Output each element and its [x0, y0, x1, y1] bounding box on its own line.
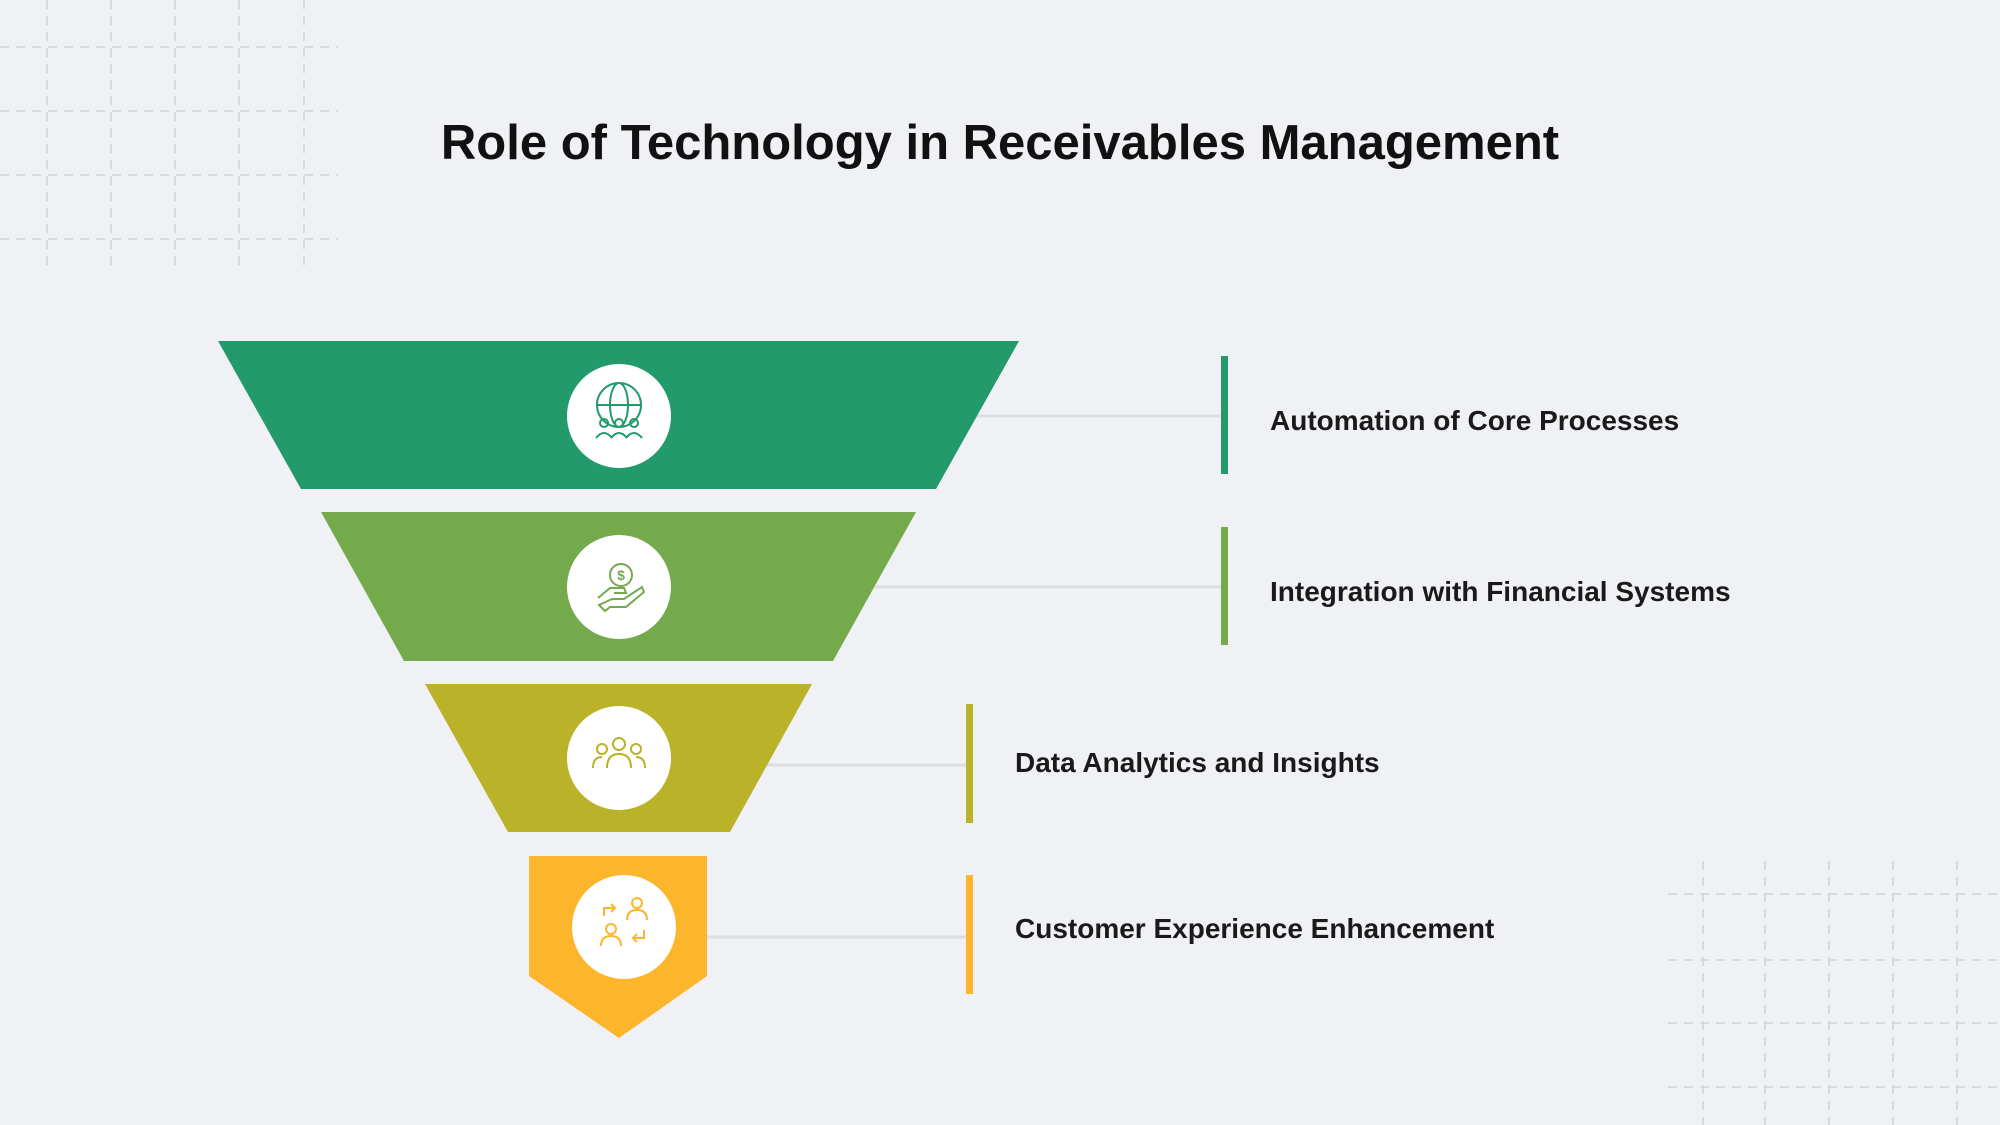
title: Role of Technology in Receivables Management [441, 116, 1559, 170]
label 2: Integration with Financial Systems [1270, 576, 1731, 607]
bars [1221, 356, 1228, 474]
funnel layer 2: $ [617, 567, 625, 583]
label 1: Automation of Core Processes [1270, 405, 1679, 436]
funnel layer 1 [218, 341, 1019, 489]
funnel layer 2 [321, 512, 916, 661]
label 4: Customer Experience Enhancement [1015, 913, 1494, 944]
label 3: Data Analytics and Insights [1015, 747, 1380, 778]
funnel layer 3 [425, 684, 812, 832]
funnel layer 4 [529, 856, 707, 1038]
